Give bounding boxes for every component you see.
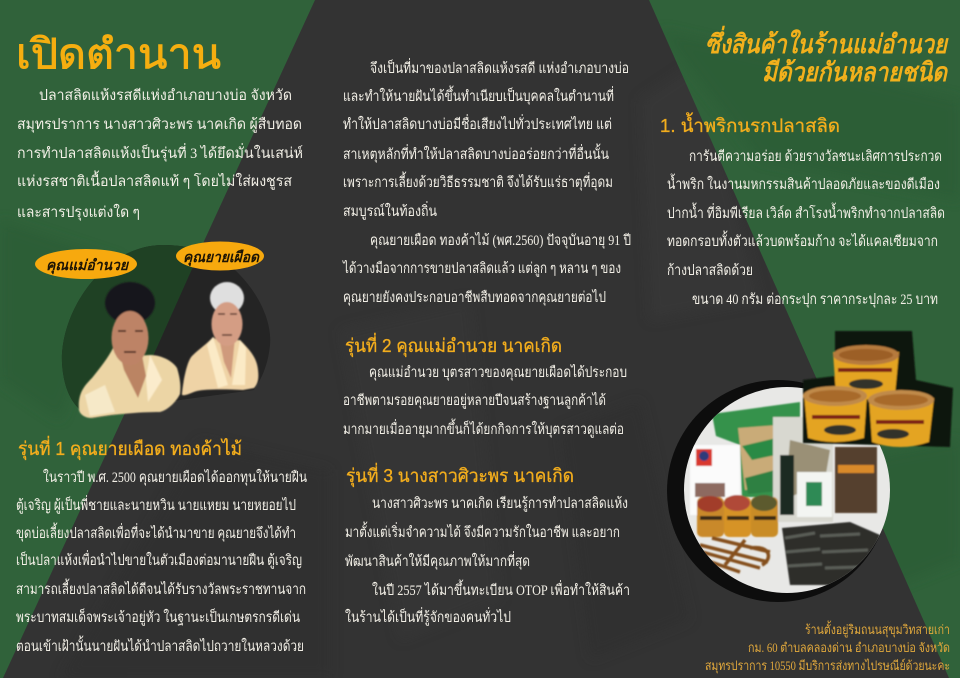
- left jar: [803, 386, 867, 442]
- generation 2 text block: มากมายเมื่ออายุมากขึ้นก็ได้ยกกิจการให้บุตรสาวดูแลต่อ: [343, 418, 624, 438]
- dried dark fish: [782, 522, 880, 585]
- generation 3 text block: มาตั้งแต่เริ่มจำความได้ จึงมีความรักในอาชีพ และอยาก: [345, 521, 620, 541]
- portrait: grandmother: [182, 282, 258, 395]
- history text block: สาเหตุหลักที่ทำให้ปลาสลิดบางบ่ออร่อยกว่าที่อื่นนั้น: [343, 143, 609, 163]
- generation 2 text block: [343, 363, 627, 438]
- intro text block: และสารปรุงแต่งใด ๆ: [17, 203, 140, 221]
- brown fish pack: [835, 447, 877, 513]
- chilli paste jars: [803, 331, 953, 447]
- history text block: จึงเป็นที่มาของปลาสลิดแห้งรสดี แห่งอำเภอบางบ่อ: [370, 58, 629, 77]
- generation 3 text block: นางสาวศิวะพร นาคเกิด เรียนรู้การทำปลาสลิดแห้ง: [372, 495, 628, 512]
- label: คุณยายเผือด: [176, 242, 264, 270]
- right jar: [868, 390, 934, 447]
- history text block: ได้วางมือจากการขายปลาสลิดแล้ว แต่ลูก ๆ หลาน ๆ ของ: [342, 259, 621, 277]
- portrait: mother: [79, 282, 180, 418]
- small jars: [697, 495, 778, 537]
- generation 1 text block: [16, 468, 307, 655]
- fish sticks: [700, 538, 770, 572]
- right title: [705, 25, 949, 87]
- generation 2 text block: คุณแม่อำนวย บุตรสาวของคุณยายเผือดได้ประกอบ: [369, 363, 627, 381]
- history text block: คุณยายยังคงประกอบอาชีพสืบทอดจากคุณยายต่อไป: [343, 288, 606, 306]
- generation 1 text block: ในราวปี พ.ศ. 2500 คุณยายเผือดได้ออกทุนให้นายฝืน: [43, 468, 307, 486]
- intro text block: [17, 87, 303, 221]
- heading: generation 3: รุ่นที่ 3 นางสาวศิวะพร นาคเกิด: [346, 463, 574, 488]
- product photo circle: [667, 380, 890, 602]
- generation 3 text block: ในร้านได้เป็นที่รู้จักของคนทั่วไป: [345, 607, 511, 626]
- shop address: [705, 620, 950, 674]
- history text block: [342, 58, 631, 306]
- history text block: ทำให้ปลาสลิดบางบ่อมีชื่อเสียงไปทั่วประเทศไทย แต่: [343, 114, 612, 133]
- intro text block: สมุทรปราการ นางสาวศิวะพร นาคเกิด ผู้สืบทอด: [17, 116, 302, 133]
- document: [690, 445, 740, 515]
- generation 2 text block: อาชีพตามรอยคุณยายอยู่หลายปีจนสร้างฐานลูกค้าได้: [343, 391, 606, 409]
- jar shadows: [803, 331, 953, 447]
- product 1 text block: ก้างปลาสลิดด้วย: [667, 262, 753, 279]
- left panel: [16, 31, 307, 655]
- generation 3 text block: [345, 495, 630, 626]
- label: คุณแม่อำนวย: คุณแม่อำนวย: [46, 257, 129, 275]
- generation 3 text block: พัฒนาสินค้าให้มีคุณภาพให้มากที่สุด: [345, 551, 530, 570]
- generation 1 text block: ขุดบ่อเลี้ยงปลาสลิดเพื่อที่จะได้นำมาขาย คุณยายจึงได้ทำ: [16, 522, 296, 542]
- generation 1 text block: เป็นปลาแห้งเพื่อนำไปขายในตัวเมืองต่อมานายฝืน ตู้เจริญ: [16, 550, 302, 569]
- green rice bag: [712, 402, 800, 497]
- centre panel: [342, 58, 631, 626]
- product 1 text block: [667, 148, 945, 308]
- generation 1 text block: ตู้เจริญ ผู้เป็นพี่ชายและนายหวิน นายแหยม นายหยอยไป: [16, 495, 296, 514]
- heading: product 1: 1. น้ำพริกนรกปลาสลิด: [660, 112, 840, 136]
- history text block: เพราะการเลี้ยงด้วยวิธีธรรมชาติ จึงได้รับแร่ธาตุที่อุดม: [343, 171, 613, 191]
- label: คุณแม่อำนวย: [35, 249, 137, 279]
- generation 1 text block: สามารถเลี้ยงปลาสลิดได้ดีจนได้รับรางวัลพระราชทานจาก: [16, 578, 306, 598]
- pale fish pack: [773, 417, 833, 522]
- portraits: [62, 245, 270, 419]
- top jar: [833, 345, 899, 400]
- history text block: คุณยายเผือด ทองค้าไม้ (พศ.2560) ปัจจุบันอายุ 91 ปี: [370, 231, 631, 249]
- intro text block: การทำปลาสลิดแห้งเป็นรุ่นที่ 3 ได้ยึดมั่นในเสน่ห์: [17, 143, 303, 162]
- history text block: สมบูรณ์ในท้องถิ่น: [343, 201, 437, 220]
- label: คุณยายเผือด: คุณยายเผือด: [183, 249, 260, 267]
- generation 1 text block: พระบาทสมเด็จพระเจ้าอยู่หัว ในฐานะเป็นเกษตรกรดีเด่น: [16, 607, 300, 626]
- title: เปิดตำนาน: [16, 31, 221, 77]
- generation 3 text block: ในปี 2557 ได้มาขึ้นทะเบียน OTOP เพื่อทำให้สินค้า: [372, 579, 630, 599]
- right panel: [660, 25, 953, 674]
- intro text block: แห่งรสชาติเนื้อปลาสลิดแท้ ๆ โดยไม่ใส่ผงชูรส: [17, 170, 292, 190]
- intro text block: ปลาสลิดแห้งรสดีแห่งอำเภอบางบ่อ จังหวัด: [39, 87, 292, 104]
- portrait backdrop blob: [62, 245, 270, 418]
- heading: generation 2: รุ่นที่ 2 คุณแม่อำนวย นาคเกิด: [345, 333, 562, 358]
- history text block: และทำให้นายฝันได้ขึ้นทำเนียบเป็นบุคคลในตำนานที่: [343, 85, 614, 105]
- heading: generation 1: รุ่นที่ 1 คุณยายเผือด ทองค้าไม้: [18, 436, 242, 461]
- generation 1 text block: ตอนเข้าเฝ้านั้นนายฝันได้นำปลาสลิดไปถวายในหลวงด้วย: [16, 635, 304, 655]
